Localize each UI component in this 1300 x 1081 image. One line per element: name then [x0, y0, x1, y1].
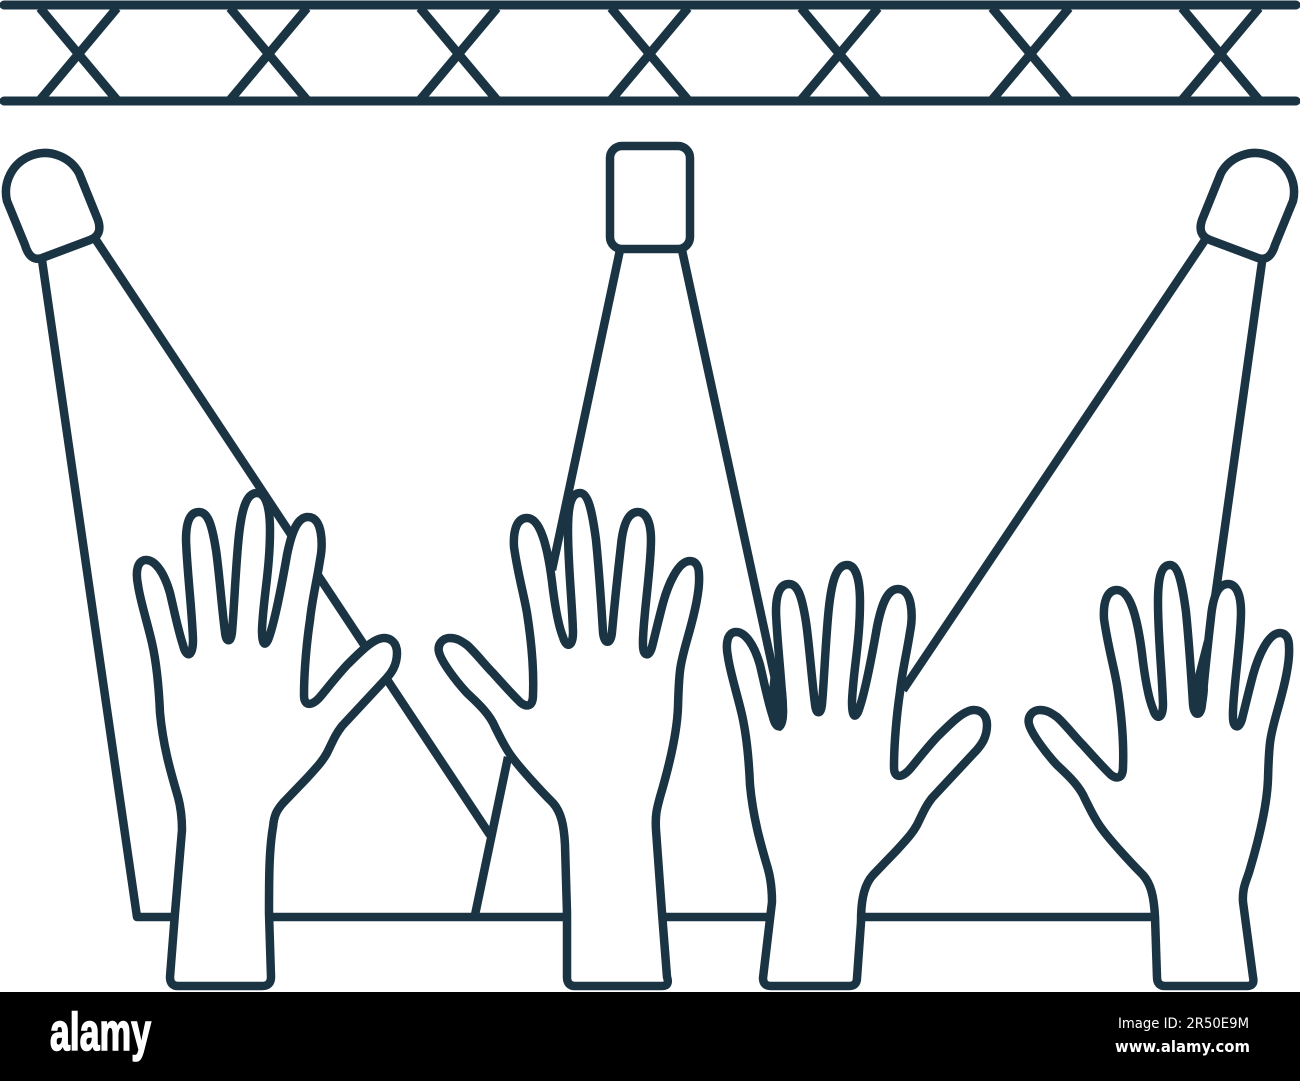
footer bar — [0, 992, 1300, 1081]
spotlight: centre — [610, 146, 690, 249]
spotlight: left — [6, 153, 99, 259]
beam overlap: third hand finger gap — [768, 660, 787, 731]
beam overlap: fourth hand finger gap — [1190, 640, 1208, 717]
footer image id: Image ID: 2R50E9M — [1118, 1016, 1249, 1032]
footer logo: alamy — [50, 1003, 151, 1062]
hand: first from left — [137, 493, 397, 986]
footer website: www.alamy.com — [1115, 1037, 1250, 1056]
light beams and stage floor — [42, 240, 1262, 917]
spotlight: right — [1201, 153, 1294, 259]
hand: third from left — [727, 565, 987, 986]
hand: second from left — [439, 493, 699, 986]
stage truss — [4, 5, 1296, 101]
hand: fourth from left — [1029, 565, 1289, 986]
